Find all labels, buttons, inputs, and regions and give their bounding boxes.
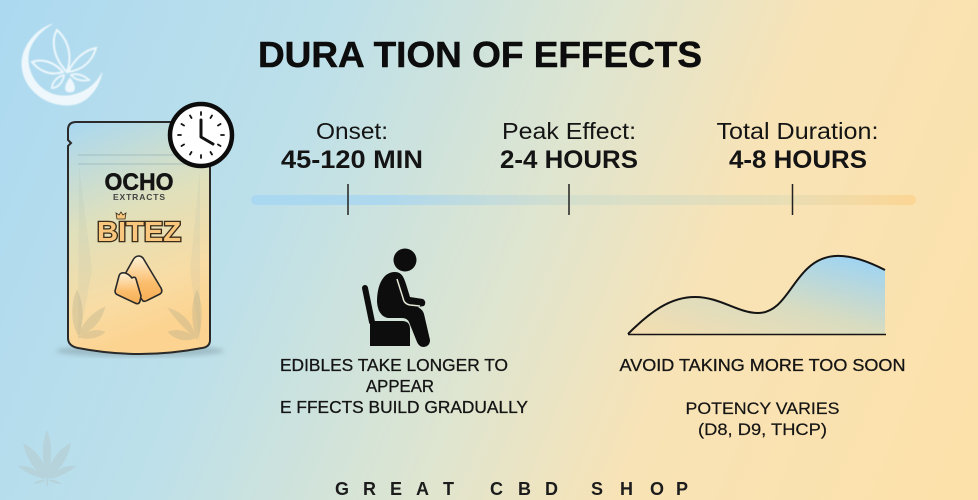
chair bbox=[365, 288, 372, 322]
pouch body bbox=[68, 122, 210, 354]
caption: avoid taking more: AVOID TAKING MORE TOO SOON bbox=[620, 355, 906, 375]
label: onset bbox=[281, 118, 423, 174]
label: onset: 45-120 MIN bbox=[281, 146, 423, 174]
chart: effect curve bbox=[628, 256, 886, 334]
pouch brand text: OCHO bbox=[104, 169, 174, 196]
pouch seal lines bbox=[78, 155, 200, 164]
caption: edibles: E FFECTS BUILD GRADUALLY bbox=[280, 397, 528, 417]
icon: seated person bbox=[365, 248, 430, 347]
label: peak effect: Peak Effect: bbox=[502, 118, 636, 144]
label: total duration: Total Duration: bbox=[716, 118, 878, 144]
pouch product name: BITEZ bbox=[97, 216, 181, 247]
caption: potency: POTENCY VARIES bbox=[686, 399, 840, 418]
footer brand: GREATCBDSHOP bbox=[335, 479, 688, 499]
timeline labels bbox=[281, 118, 878, 174]
pouch leaf right bbox=[168, 290, 202, 340]
label: peak effect bbox=[500, 118, 638, 174]
label: total duration: 4-8 HOURS bbox=[729, 146, 867, 174]
icon: product pouch bbox=[56, 122, 224, 357]
pouch shadow bbox=[56, 345, 224, 357]
caption: edibles: APPEAR bbox=[366, 376, 434, 396]
caption: edibles bbox=[280, 355, 528, 417]
pouch leaf left bbox=[73, 290, 105, 338]
icon: clock bbox=[170, 104, 232, 166]
caption: potency bbox=[686, 399, 840, 439]
body bbox=[377, 272, 430, 347]
icon: gummies bbox=[115, 256, 162, 304]
pouch crown bbox=[116, 212, 126, 219]
icon: brand logo bbox=[22, 24, 102, 105]
label: total duration bbox=[716, 118, 878, 174]
label: peak effect: 2-4 HOURS bbox=[500, 146, 638, 174]
title: DURA TION OF EFFECTS bbox=[258, 34, 702, 75]
icon: faint leaf bbox=[18, 430, 76, 486]
label: onset: Onset: bbox=[316, 118, 388, 144]
pouch folds bbox=[78, 166, 200, 345]
arm highlight bbox=[397, 279, 420, 306]
clock hands bbox=[201, 120, 213, 144]
icon: product pouch: EXTRACTS bbox=[113, 192, 165, 202]
caption: potency: (D8, D9, THCP) bbox=[698, 420, 827, 439]
timeline bar bbox=[251, 184, 916, 215]
caption: edibles: EDIBLES TAKE LONGER TO bbox=[280, 355, 508, 375]
